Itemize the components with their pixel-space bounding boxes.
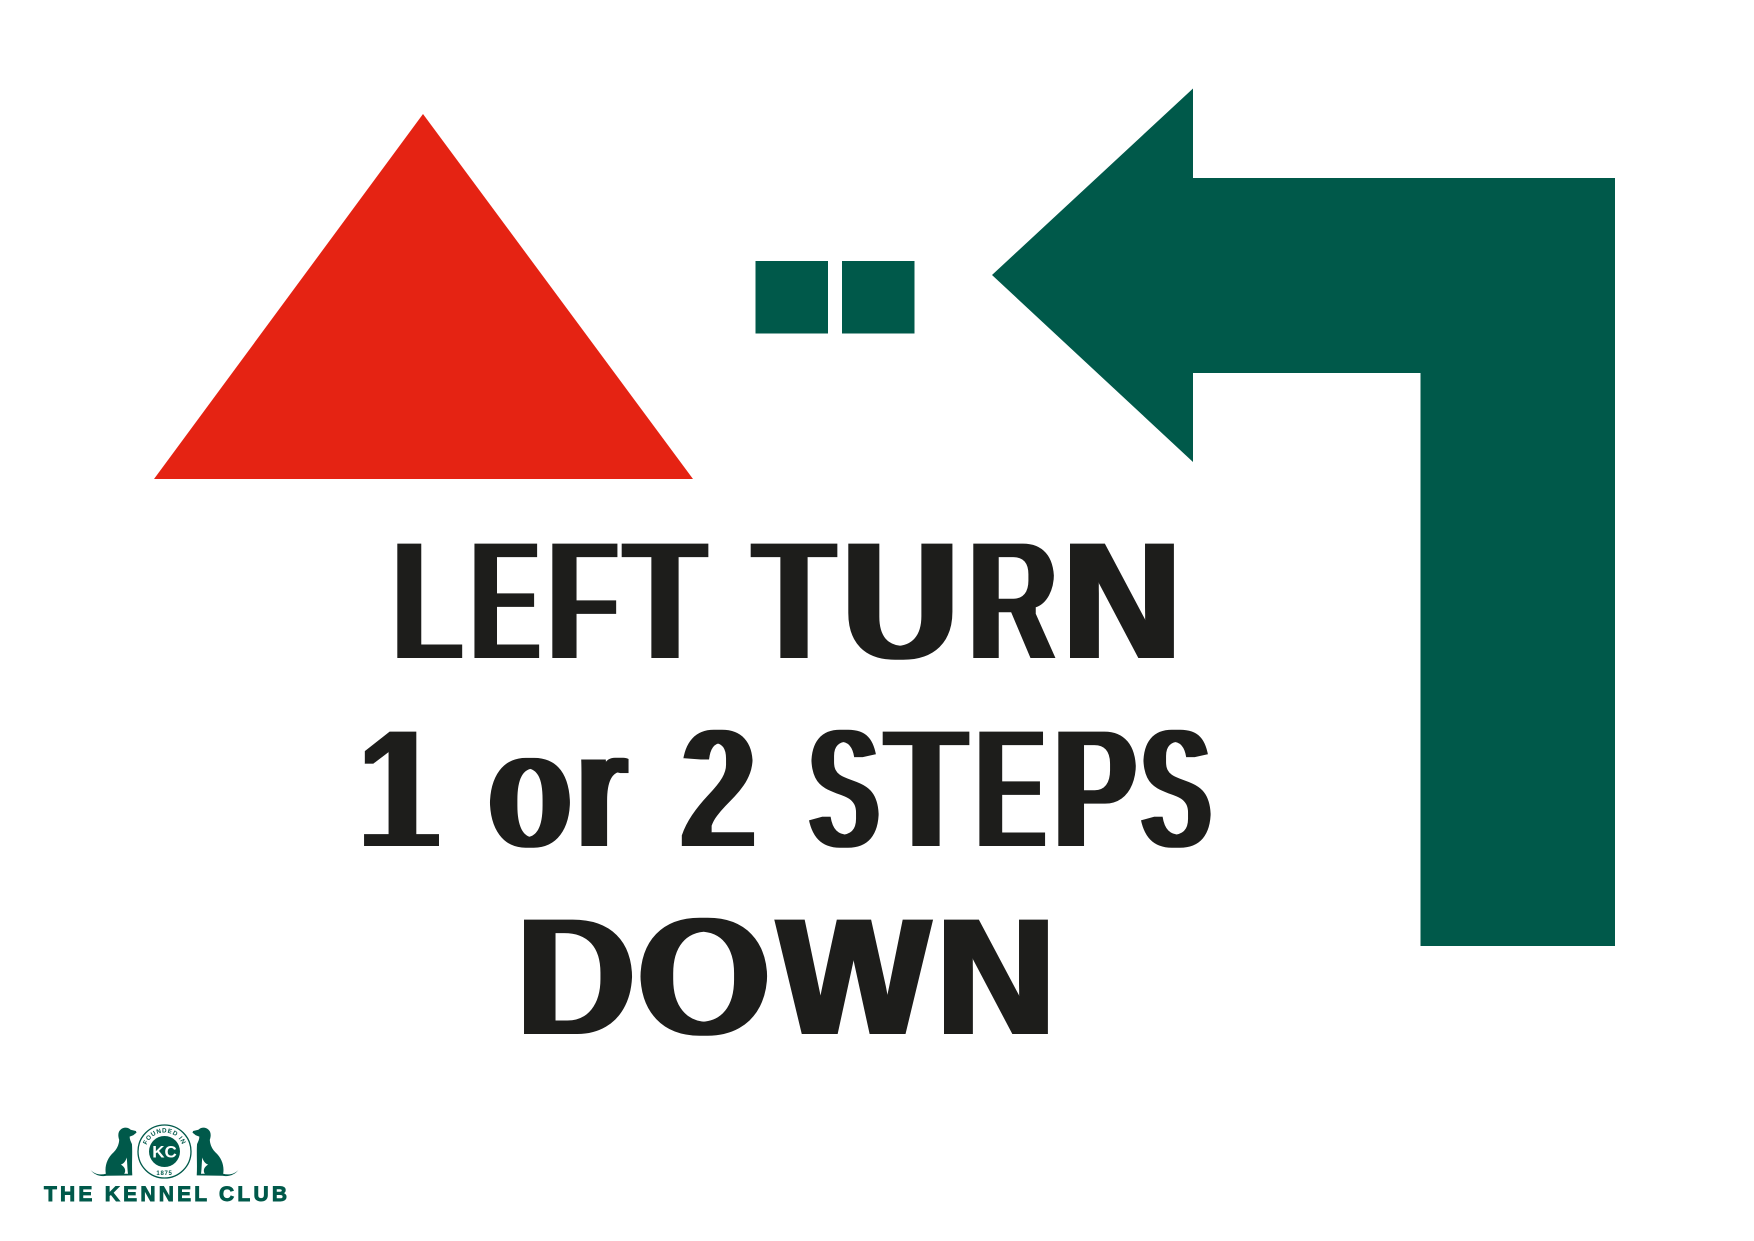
logo: The Kennel Club bbox=[44, 1124, 287, 1206]
right dog bbox=[192, 1128, 239, 1176]
line: 1 or 2 STEPS: S bbox=[1141, 692, 1211, 887]
icon: two green step squares bbox=[756, 261, 914, 334]
line: 1 or 2 STEPS: r bbox=[576, 692, 626, 887]
line: 1 or 2 STEPS: 1 bbox=[359, 692, 439, 887]
line: LEFT TURN: L bbox=[394, 504, 462, 699]
line: LEFT TURN: R bbox=[969, 504, 1057, 699]
logo wordmark: THE KENNEL CLUB bbox=[44, 1183, 287, 1206]
line: LEFT TURN: N bbox=[1063, 504, 1181, 699]
line: 1 or 2 STEPS: T bbox=[885, 692, 967, 887]
KC disc bbox=[149, 1136, 180, 1167]
line: 1 or 2 STEPS: o bbox=[489, 692, 571, 887]
line: LEFT TURN: E bbox=[472, 504, 539, 699]
instruction text bbox=[359, 504, 1211, 1075]
line: LEFT TURN: T bbox=[753, 504, 835, 699]
line: DOWN: W bbox=[777, 880, 931, 1075]
line: 1 or 2 STEPS: E bbox=[976, 692, 1045, 887]
founded text: FOUNDED IN bbox=[142, 1128, 186, 1145]
left dog bbox=[90, 1128, 137, 1176]
seal ring bbox=[138, 1125, 191, 1178]
KC letters: KC bbox=[152, 1142, 177, 1162]
arrow: left turn bbox=[992, 88, 1615, 946]
line: 1 or 2 STEPS: P bbox=[1054, 692, 1136, 887]
logo emblem bbox=[90, 1124, 238, 1179]
line: LEFT TURN: U bbox=[843, 504, 958, 699]
line: DOWN: D bbox=[517, 880, 635, 1075]
line: DOWN: O bbox=[637, 880, 770, 1075]
icon: red triangle bbox=[154, 114, 693, 479]
line: LEFT TURN: T bbox=[624, 504, 706, 699]
year text: 1875 bbox=[156, 1171, 173, 1177]
line: LEFT TURN: F bbox=[549, 504, 618, 699]
line: 1 or 2 STEPS: S bbox=[809, 692, 879, 887]
line: 1 or 2 STEPS: 2 bbox=[681, 692, 755, 887]
line: DOWN: N bbox=[937, 880, 1055, 1075]
